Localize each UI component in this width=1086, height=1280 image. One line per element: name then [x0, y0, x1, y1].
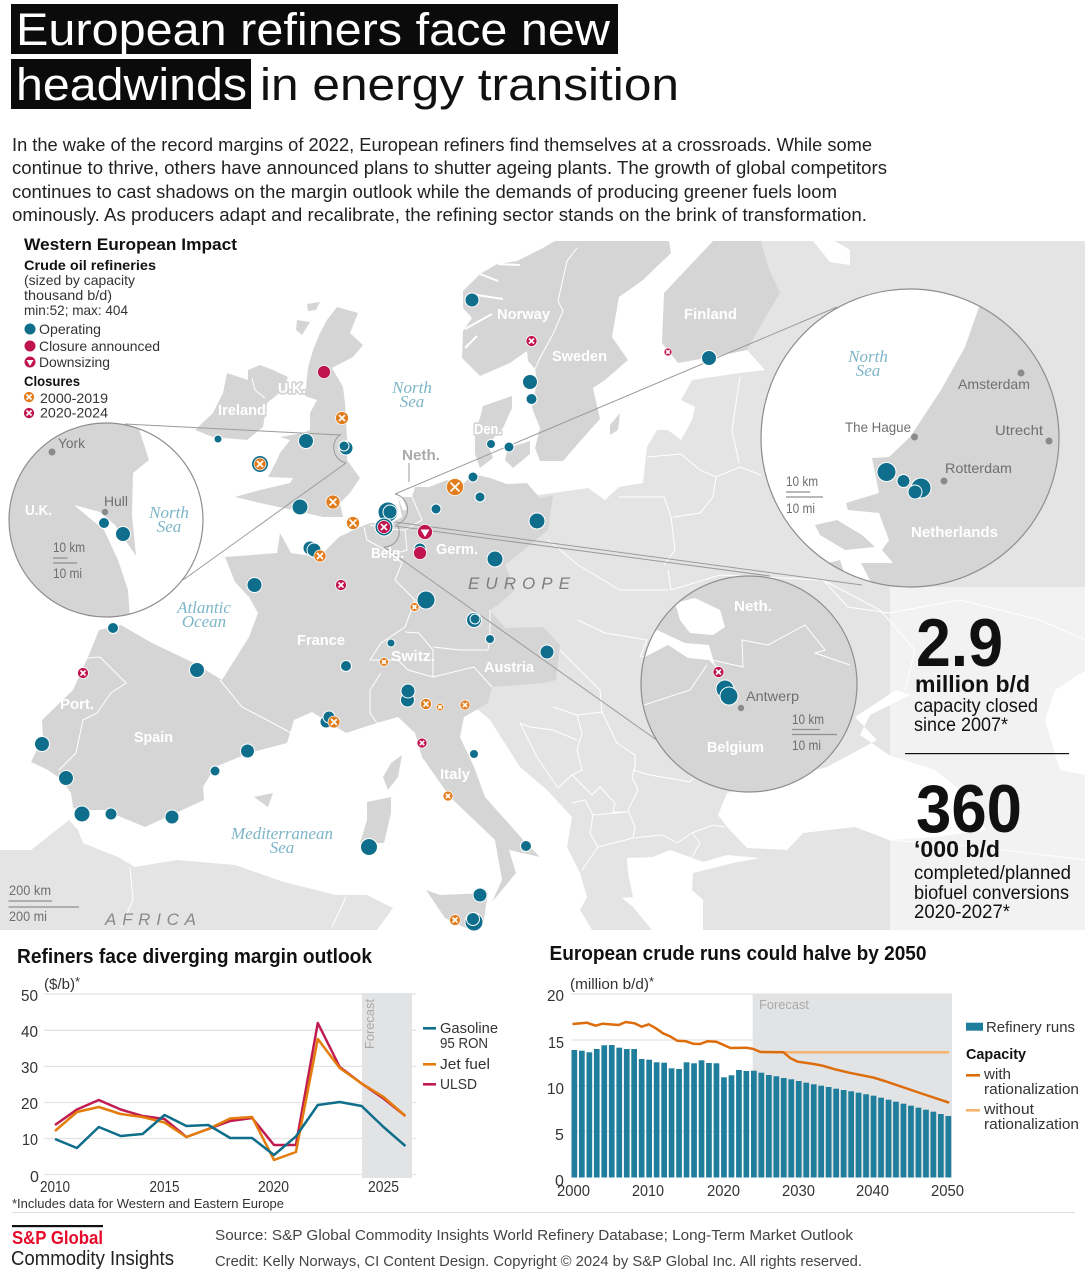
chart: crude runs: 0: [555, 1173, 564, 1190]
intro text: ominously. As producers adapt and recalibrate, the refining sector stands on the brink of transformation.: [12, 205, 867, 225]
inset: Antwerp: 10 km: [792, 711, 824, 727]
map legend: 2020-2024: [40, 404, 108, 420]
inset: Rotterdam: 10 mi: [786, 500, 815, 516]
closures 2020-2024: [78, 336, 672, 748]
closures 2000-2019: [254, 412, 470, 926]
inset: Humber: York: [58, 435, 86, 451]
legend: margin chart: 95 RON: [440, 1035, 488, 1052]
map place labels: Neth.: [402, 447, 440, 464]
source and credit: [215, 1227, 862, 1270]
chart: refining margins: 2015: [150, 1179, 180, 1196]
chart: crude runs: 2020: [707, 1183, 740, 1200]
inset: Antwerp: Belgium: [707, 739, 764, 756]
logo: [11, 1225, 174, 1270]
chart: refining margins: 2010: [40, 1179, 70, 1196]
chart: crude runs: 2010: [632, 1183, 664, 1200]
inset: Rotterdam: Amsterdam: [958, 376, 1030, 392]
callout: capacity closed: 2.9: [916, 605, 1003, 681]
map place labels: North: [391, 378, 432, 397]
map place labels: Norway: [497, 306, 551, 323]
map place labels: Belg.: [371, 545, 404, 562]
legend: crude runs chart: rationalization: [984, 1116, 1079, 1133]
inset: Humber: Hull: [104, 493, 128, 509]
map place labels: Sea: [270, 838, 294, 857]
source and credit: Source: S&P Global Commodity Insights World Refinery Database; Long-Term Market Outlook: [215, 1227, 854, 1244]
map place labels: Italy: [440, 766, 471, 783]
inlets and fjords: [342, 264, 520, 510]
chart: refining margins: Forecast: [362, 999, 377, 1049]
legend: margin chart: [423, 1020, 498, 1093]
chart: crude runs: 20: [547, 988, 564, 1005]
title: European refiners face new: [16, 4, 610, 55]
callout: capacity closed: capacity closed: [914, 696, 1038, 717]
chart: crude runs: Forecast: [759, 997, 809, 1012]
map scale bar: [8, 882, 79, 924]
chart: crude runs: 2050: [931, 1183, 964, 1200]
chart: refining margins: *: [75, 974, 80, 989]
chart: crude runs: 15: [548, 1035, 564, 1052]
legend: crude runs chart: Refinery runs: [986, 1019, 1075, 1036]
map place labels: Den.: [474, 421, 502, 438]
inset: Humber: [0, 420, 203, 620]
callout: biofuel conversions: ‘000 b/d: [914, 836, 1000, 862]
map legend: Operating: [39, 321, 101, 337]
map place labels: AFRICA: [104, 910, 196, 929]
country borders: [59, 248, 1086, 927]
map legend: 2000-2019: [40, 390, 108, 406]
footnote: *Includes data for Western and Eastern Europe: [12, 1196, 284, 1211]
non-focus land: [0, 241, 1085, 930]
legend: crude runs chart: rationalization: [984, 1081, 1079, 1098]
heading: crude runs chart: European crude runs could halve by 2050: [550, 943, 926, 965]
chart: refining margins: 30: [21, 1060, 38, 1077]
chart: refining margins: 2020: [258, 1179, 289, 1196]
map legend: thousand b/d): [24, 287, 112, 303]
callout: biofuel conversions: 360: [916, 771, 1022, 847]
leader lines: [125, 307, 862, 753]
inset: Rotterdam: 10 km: [786, 473, 818, 489]
title: [11, 4, 679, 110]
map place labels: Port.: [60, 696, 94, 713]
operating refineries: [34, 293, 716, 931]
chart: crude runs: 5: [555, 1127, 564, 1144]
title: headwinds: [16, 59, 247, 110]
chart: crude runs: 2040: [856, 1183, 889, 1200]
legend: margin chart: Gasoline: [440, 1020, 498, 1037]
inset: Antwerp: 10 mi: [792, 737, 821, 753]
chart: refining margins: 2025: [368, 1179, 399, 1196]
legend: crude runs chart: with: [983, 1066, 1011, 1083]
inset: Rotterdam: North: [847, 347, 888, 366]
map place labels: EUROPE: [468, 574, 571, 593]
chart: refining margins: 50: [21, 988, 38, 1005]
logo: Commodity Insights: [11, 1248, 174, 1270]
panel tint for stats: [890, 587, 1086, 930]
inset: Rotterdam: The Hague: [845, 419, 911, 435]
map place labels: Sea: [400, 392, 424, 411]
map scale bar: 200 mi: [9, 908, 47, 924]
chart: crude runs: [547, 974, 964, 1200]
legend: margin chart: ULSD: [440, 1076, 477, 1093]
chart: crude runs: (million b/d): [570, 976, 649, 993]
map place labels: Atlantic: [176, 598, 231, 617]
legend: margin chart: Jet fuel: [440, 1056, 490, 1073]
callout: biofuel conversions: completed/planned: [914, 863, 1071, 884]
logo: S&P Global: [12, 1227, 103, 1248]
chart: crude runs: 2030: [782, 1183, 815, 1200]
inset: Humber: U.K.: [25, 502, 52, 519]
map place labels: Switz.: [391, 648, 435, 665]
inset: Antwerp: Antwerp: [746, 688, 799, 704]
map legend: Crude oil refineries: [24, 257, 156, 273]
map place labels: France: [297, 632, 345, 649]
legend: crude runs chart: Capacity: [966, 1046, 1027, 1063]
inset: Antwerp: Neth.: [734, 598, 772, 615]
chart: refining margins: 10: [22, 1132, 38, 1149]
map legend: [24, 235, 237, 420]
callout: capacity closed: million b/d: [915, 671, 1030, 697]
callout: biofuel conversions: 2020-2027*: [914, 902, 1011, 923]
map place labels: Ocean: [182, 612, 226, 631]
chart: refining margins: [21, 974, 416, 1196]
map place labels: Sweden: [552, 348, 607, 365]
map place labels: [60, 306, 737, 929]
chart: refining margins: ($/b): [44, 976, 75, 993]
map place labels: Spain: [134, 729, 173, 746]
inset: Rotterdam: Utrecht: [995, 422, 1043, 438]
map legend: Closures: [24, 373, 80, 389]
inset: Antwerp: [636, 576, 857, 792]
inset: Humber: 10 km: [53, 539, 85, 555]
chart: refining margins: 20: [21, 1096, 38, 1113]
closure announced and downsizing: [318, 366, 432, 560]
callout: biofuel conversions: biofuel conversions: [914, 883, 1069, 904]
map legend: Downsizing: [39, 354, 110, 370]
callout: capacity closed: [905, 605, 1069, 754]
map legend: (sized by capacity: [24, 272, 135, 288]
callout: biofuel conversions: [914, 771, 1071, 923]
intro text: continues to cast shadows on the margin outlook while the demands of producing greener fuels loom: [12, 182, 837, 202]
inset: Rotterdam: [761, 289, 1070, 590]
map legend: min:52; max: 404: [24, 302, 128, 318]
callout: capacity closed: since 2007*: [914, 715, 1009, 736]
inset: Humber: North: [148, 503, 189, 522]
map place labels: Austria: [484, 659, 535, 676]
map place labels: Germ.: [436, 541, 478, 558]
map scale bar: 200 km: [9, 882, 51, 898]
inset: Rotterdam: Rotterdam: [945, 460, 1012, 476]
inset: Humber: 10 mi: [53, 565, 82, 581]
chart: crude runs: 10: [547, 1081, 564, 1098]
heading: margin chart: Refiners face diverging margin outlook: [17, 946, 373, 968]
chart: crude runs: *: [649, 974, 654, 989]
intro text: [12, 135, 887, 225]
chart: refining margins: 40: [21, 1024, 38, 1041]
inset: Rotterdam: Netherlands: [911, 524, 998, 541]
legend: crude runs chart: without: [983, 1101, 1035, 1118]
map legend: Closure announced: [39, 338, 160, 354]
seas: [0, 241, 1086, 930]
inset: Rotterdam: Sea: [856, 361, 880, 380]
inset: Humber: Sea: [157, 517, 181, 536]
map legend: Western European Impact: [24, 235, 237, 254]
chart: crude runs: 2000: [557, 1183, 590, 1200]
western Europe land: [31, 241, 780, 930]
map place labels: Ireland: [218, 402, 266, 419]
map place labels: U.K.: [278, 380, 306, 397]
panel: map: [0, 241, 1086, 931]
map place labels: Mediterranean: [230, 824, 333, 843]
map place labels: Finland: [684, 306, 737, 323]
chart: refining margins: 0: [30, 1169, 39, 1186]
source and credit: Credit: Kelly Norways, CI Content Design. Copyright © 2024 by S&P Global Inc. All rights reserved.: [215, 1253, 862, 1270]
legend: crude runs chart: [966, 1019, 1079, 1133]
intro text: In the wake of the record margins of 2022, European refiners find themselves at a crossroads. While some: [12, 135, 872, 155]
intro text: continue to thrive, others have announced plans to shutter ageing plants. The growth of global competitors: [12, 158, 887, 178]
title: in energy transition: [260, 59, 679, 110]
